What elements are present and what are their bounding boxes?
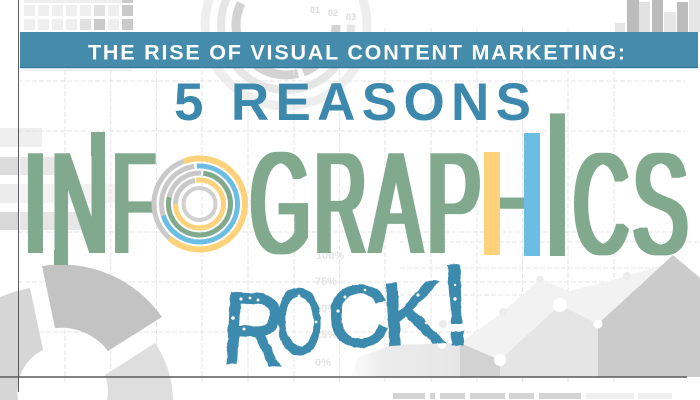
letter I: I xyxy=(24,123,47,285)
chart axis labels: 50% xyxy=(315,303,337,315)
banner xyxy=(20,32,698,68)
chart: ring letter O xyxy=(135,140,264,268)
letter F: F xyxy=(113,123,155,285)
donut segment left xyxy=(0,288,43,400)
title: infographics xyxy=(24,68,688,300)
chart: background radial rings: 02 xyxy=(328,8,338,18)
caption bars bottom xyxy=(393,393,672,399)
chart: background bars left xyxy=(0,128,115,230)
N stem extension bottom xyxy=(54,250,68,265)
letter N: N xyxy=(52,122,108,284)
N stem extension top xyxy=(91,132,105,156)
H yellow stem xyxy=(484,152,500,255)
chart: background radial rings: 03 xyxy=(346,12,356,22)
chart: area chart bottom right xyxy=(350,255,700,377)
chart axis labels: 100% xyxy=(316,250,344,262)
letter G: G xyxy=(250,122,310,284)
large right area xyxy=(598,255,700,377)
rock paint specks xyxy=(231,284,457,330)
exclamation mark: ! xyxy=(439,241,473,369)
back dots xyxy=(439,272,631,328)
letter R: R xyxy=(315,123,366,285)
white dots xyxy=(438,298,602,366)
middle area xyxy=(500,305,598,377)
donut segment right xyxy=(105,343,173,400)
chart: background radial rings xyxy=(205,0,367,106)
letter R: R xyxy=(220,272,287,387)
icon: background heat grid xyxy=(24,0,133,71)
letter O: O xyxy=(274,271,324,374)
letter P: P xyxy=(427,122,481,284)
letter C: C xyxy=(574,122,628,285)
chart axis labels: 75% xyxy=(315,276,337,288)
banner text: THE RISE OF VISUAL CONTENT MARKETING: xyxy=(88,40,625,64)
donut segment dark xyxy=(42,264,162,351)
light back layer xyxy=(460,262,673,377)
letter K: K xyxy=(379,264,446,364)
chart axis labels xyxy=(315,250,344,369)
H blue stem xyxy=(524,133,540,256)
chart: donut bottom left xyxy=(0,264,173,400)
letter H: H xyxy=(480,125,544,286)
letter S: S xyxy=(633,124,688,286)
tall letter I: I xyxy=(546,68,569,300)
chart axis labels: 0% xyxy=(315,357,331,369)
chart axis labels: 25% xyxy=(315,329,337,341)
subtitle: 5 reasons: 5 REASONS xyxy=(174,73,531,132)
letter A: A xyxy=(370,122,422,284)
small dark wedge xyxy=(460,343,500,377)
title: rock xyxy=(220,241,473,387)
chart: background radial rings: 01 xyxy=(310,5,320,15)
left faded area xyxy=(350,343,460,377)
chart: background bars top right xyxy=(615,0,700,32)
letter C: C xyxy=(325,268,391,366)
